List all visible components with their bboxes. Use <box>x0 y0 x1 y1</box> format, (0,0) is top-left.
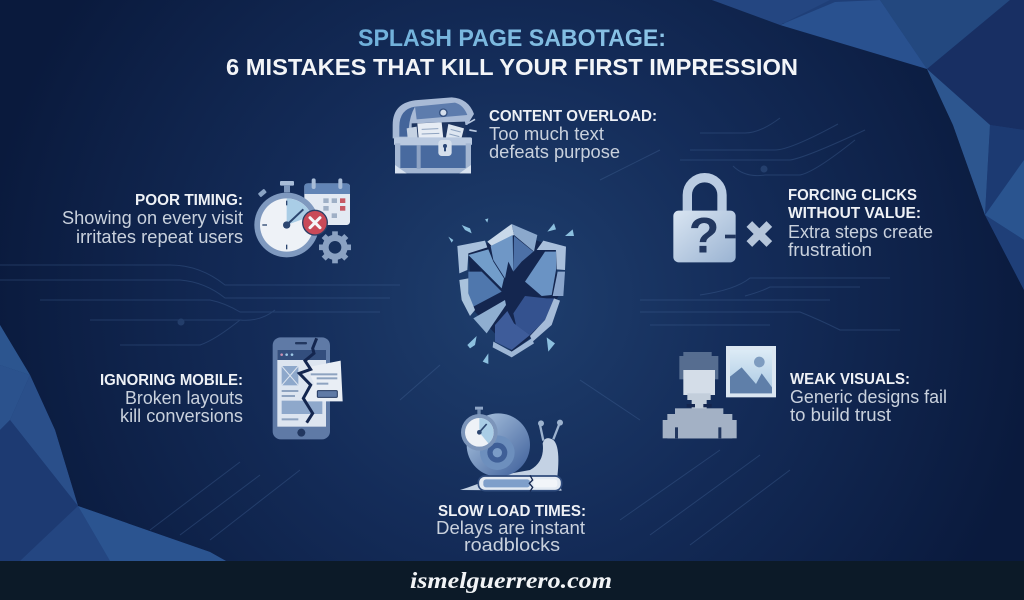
text: content overload: Too much text <box>489 124 604 144</box>
text: poor timing: Showing on every visit <box>62 208 243 228</box>
text: forcing clicks <box>788 187 933 260</box>
icon: snail with stopwatch and loading bar <box>460 407 563 491</box>
text: slow load times: roadblocks <box>464 535 560 555</box>
text: weak visuals: to build trust <box>790 405 891 425</box>
text: poor timing: irritates repeat users <box>76 227 243 247</box>
polygon decoration: top right <box>712 0 1024 290</box>
title: SPLASH PAGE SABOTAGE: <box>358 25 666 52</box>
icon: cracked phone <box>273 337 343 439</box>
text: forcing clicks: Extra steps create <box>788 222 933 242</box>
panel: slow load times <box>436 407 586 555</box>
icon: stopwatch, calendar and gear <box>254 178 351 263</box>
footer: website: ismelguerrero.com <box>410 568 612 593</box>
text: slow load times <box>436 503 586 555</box>
title <box>226 25 798 80</box>
text: content overload: CONTENT OVERLOAD: <box>489 108 657 125</box>
text: forcing clicks: WITHOUT VALUE: <box>788 205 921 222</box>
text: weak visuals: Generic designs fail <box>790 387 947 407</box>
text: ignoring mobile <box>100 372 243 426</box>
icon: padlock with question mark and cross: ? <box>689 208 719 264</box>
icon: broken shield <box>448 218 574 364</box>
text: ignoring mobile: IGNORING MOBILE: <box>100 372 243 389</box>
text: poor timing <box>62 192 243 247</box>
text: slow load times: SLOW LOAD TIMES: <box>438 503 586 520</box>
panel: forcing clicks without value <box>673 178 933 264</box>
icon: pixelated person and image placeholder <box>663 346 776 438</box>
text: ignoring mobile: kill conversions <box>120 406 243 426</box>
text: forcing clicks: frustration <box>788 240 872 260</box>
circuit lines <box>0 118 900 545</box>
text: content overload: defeats purpose <box>489 142 620 162</box>
panel: content overload <box>393 97 657 173</box>
title: 6 MISTAKES THAT KILL YOUR FIRST IMPRESSION <box>226 54 798 80</box>
text: ignoring mobile: Broken layouts <box>125 388 243 408</box>
text: poor timing: POOR TIMING: <box>135 192 243 209</box>
text: content overload <box>489 108 657 162</box>
text: weak visuals <box>790 371 947 425</box>
text: weak visuals: WEAK VISUALS: <box>790 371 910 388</box>
text: forcing clicks: FORCING CLICKS <box>788 187 917 204</box>
footer bar <box>0 561 1024 600</box>
text: slow load times: Delays are instant <box>436 518 585 538</box>
polygon decoration: bottom left <box>0 325 226 561</box>
panel: ignoring mobile <box>100 337 343 439</box>
icon: treasure chest <box>393 97 477 173</box>
icon: padlock with question mark and cross <box>673 178 769 264</box>
panel: poor timing <box>62 178 351 263</box>
panel: weak visuals <box>663 346 947 438</box>
